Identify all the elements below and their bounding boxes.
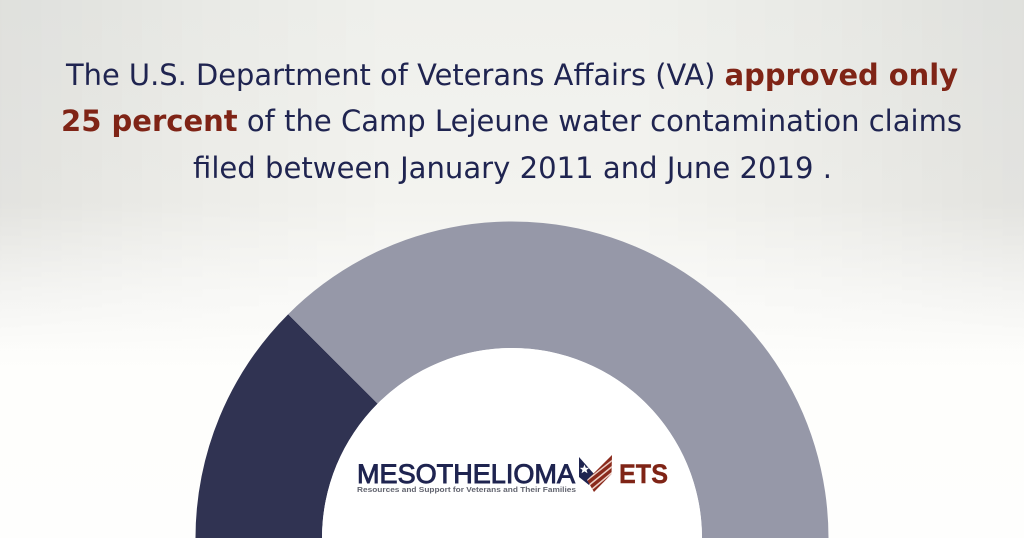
headline text: The U.S. Department of Veterans Affairs (VA) approved only — [65, 58, 958, 92]
logo icon: flag chevron — [579, 455, 614, 492]
donut segment: approved 25 percent — [196, 314, 378, 538]
logo: Mesothelioma Vets — [357, 455, 668, 494]
headline text: filed between January 2011 and June 2019 . — [193, 151, 832, 185]
donut chart — [196, 221, 828, 538]
logo tagline: Resources and Support for Veterans and Their Families — [357, 487, 576, 494]
donut centre — [322, 348, 702, 538]
headline text: 25 percent of the Camp Lejeune water contamination claims — [61, 104, 962, 138]
logo wordmark: MESOTHELIOMA — [357, 459, 575, 489]
headline text — [61, 58, 962, 185]
donut segment: remaining claims — [288, 221, 828, 538]
logo wordmark: ETS: ETS — [619, 459, 668, 489]
